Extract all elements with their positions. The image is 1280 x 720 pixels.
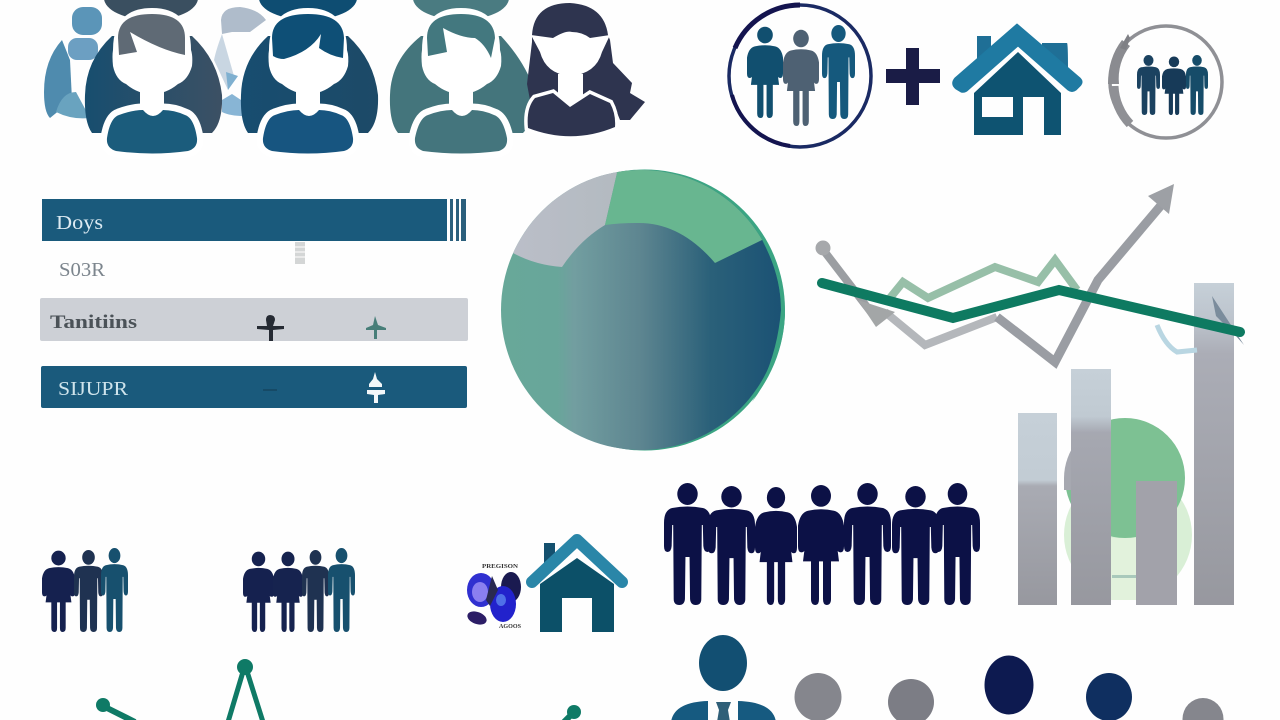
back figure: light blue left: [44, 7, 102, 118]
bar: Doys: Doys: [56, 212, 103, 234]
avatar 2: [241, 0, 378, 154]
avatar 3: [390, 0, 532, 154]
icon: blue blob with tiny text: [466, 564, 522, 630]
avatar 1: [85, 0, 222, 154]
head: grey 1: [794, 673, 842, 720]
bar: SI JUPR: SIJUPR: [58, 378, 129, 400]
avatar 4: dark woman: [527, 3, 645, 136]
icon: white cross: [367, 372, 385, 403]
icon: small stripes: [295, 242, 305, 264]
icon: house small: [532, 540, 622, 632]
icon: house large: [953, 24, 1082, 135]
bar: Tanitiins: [40, 298, 468, 341]
bar: Doys: [42, 199, 466, 241]
icon: family in grey ring: [1108, 26, 1222, 138]
pie chart: [501, 170, 785, 450]
icon: dark cross: [257, 315, 284, 341]
icon: plus: [886, 48, 940, 105]
text label: S03R: S03R: [59, 259, 106, 281]
chart: bars with green circles: [1018, 283, 1234, 605]
person with tie: [671, 635, 776, 720]
icon: blue blob with tiny text: AGOOS: [499, 624, 522, 630]
bar: Tanitiins: Tanitiins: [50, 312, 137, 333]
icon: blue blob with tiny text: PREGISON: [482, 564, 519, 570]
head: grey 3: [1182, 698, 1224, 720]
back figure: grey right: [214, 7, 266, 116]
group of four people: [243, 548, 355, 632]
chart: trend lines with arrows: [816, 184, 1244, 362]
network diagram fragment: [96, 659, 581, 720]
head: navy: [984, 656, 1034, 714]
group of seven people: [664, 483, 980, 605]
icon: teal cross: [366, 316, 386, 339]
head: grey 2: [888, 679, 934, 720]
group of three people: [42, 548, 128, 632]
bar: SI JUPR: [41, 366, 467, 408]
icon: family in circle: [729, 5, 871, 147]
head: blue: [1086, 673, 1132, 720]
